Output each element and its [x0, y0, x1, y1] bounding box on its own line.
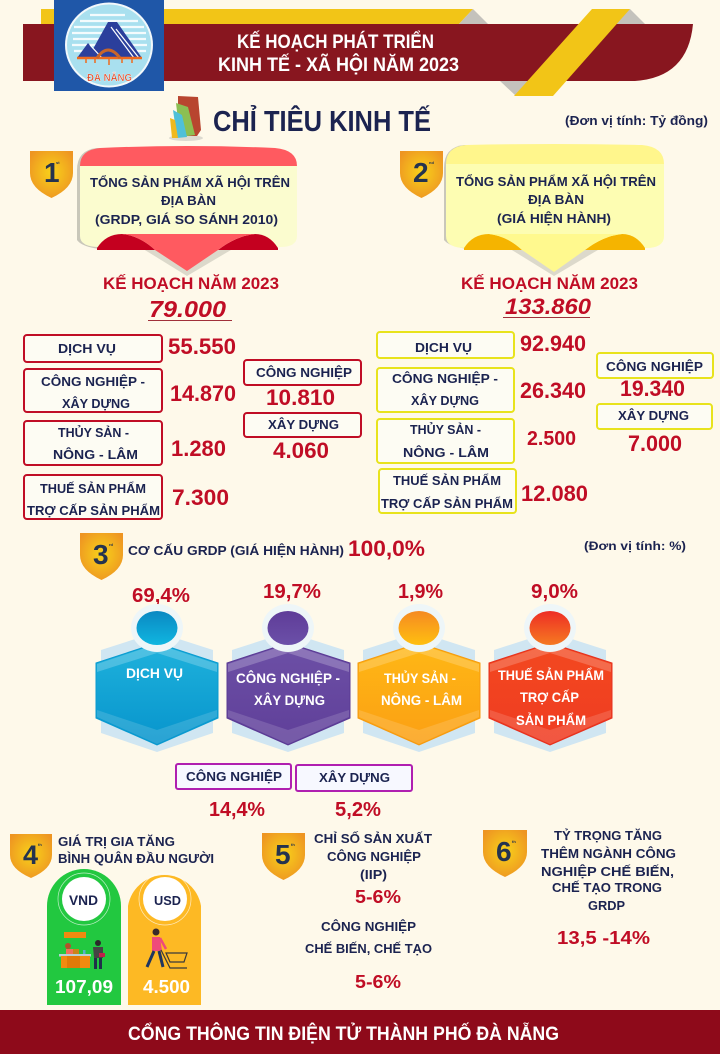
- right sub-item: industry: [597, 353, 713, 401]
- badge 4: th: [38, 842, 42, 847]
- hexagon: services: DỊCH VỤ: [126, 665, 183, 681]
- card: USD: USD: [154, 893, 181, 908]
- text block: manufacturing: CHẾ BIẾN, CHẾ TẠO: [305, 941, 432, 956]
- heading: GRDP structure: CƠ CẤU GRDP (GIÁ HIỆN HÀNH): [128, 543, 344, 558]
- plan 2023 total: 79.000: [103, 274, 279, 322]
- left sub-item: industry: 10.810: [266, 385, 335, 410]
- text block: industrial production index: CHỈ SỐ SẢN XUẤT: [314, 831, 432, 846]
- badge 2: nd: [429, 160, 434, 165]
- banner title: KINH TẾ - XÃ HỘI NĂM 2023: [218, 54, 459, 76]
- unit note: billion dong: (Đơn vị tính: Tỷ đồng): [565, 114, 708, 128]
- left sub-item: industry: [244, 360, 361, 410]
- hexagon: fisheries, agriculture, forestry: 1,9%: [398, 581, 443, 603]
- logo: Da Nang: [54, 0, 164, 91]
- text block: industrial production index: [314, 831, 432, 907]
- left sub-item: industry: CÔNG NGHIỆP: [256, 365, 352, 380]
- footer: [0, 1010, 720, 1054]
- left breakdown: fisheries, agriculture, forestry: NÔNG - LÂM: [53, 447, 138, 462]
- logo wordmark: ĐÀ NẴNG: [87, 71, 132, 84]
- callout 1 text: TỔNG SẢN PHẨM XÃ HỘI TRÊN: [90, 175, 290, 190]
- badge 6: th: [512, 839, 516, 844]
- hexagon: industry and construction: 19,7%: [263, 581, 321, 603]
- right breakdown: services: [377, 331, 586, 358]
- callout 2 text: TỔNG SẢN PHẨM XÃ HỘI TRÊN: [456, 174, 656, 189]
- hexagon: fisheries, agriculture, forestry: NÔNG - LÂM: [381, 691, 462, 708]
- heading: economic targets: CHỈ TIÊU KINH TẾ: [213, 104, 431, 138]
- banner title: KẾ HOẠCH PHÁT TRIỂN: [237, 31, 434, 53]
- badge 1: [30, 151, 73, 198]
- badge 1: st: [56, 160, 60, 165]
- right sub-item: construction: [597, 404, 712, 456]
- badge 2: [400, 151, 443, 198]
- right breakdown: fisheries, agriculture, forestry: THỦY SẢN -: [410, 422, 481, 437]
- unit note: percent: (Đơn vị tính: %): [584, 539, 686, 553]
- sub-item: construction share: [296, 765, 412, 821]
- left breakdown: services: DỊCH VỤ: [58, 341, 116, 356]
- badge 3: 3: [93, 539, 109, 570]
- left breakdown: industry and construction: [24, 369, 236, 412]
- heading: value added per capita: GIÁ TRỊ GIA TĂNG: [58, 834, 175, 849]
- hexagon: product taxes: THUẾ SẢN PHẨM: [498, 666, 604, 683]
- right breakdown: fisheries, agriculture, forestry: 2.500: [527, 428, 576, 450]
- left breakdown: industry and construction: 14.870: [170, 381, 236, 406]
- footer: CỔNG THÔNG TIN ĐIỆN TỬ THÀNH PHỐ ĐÀ NẴNG: [128, 1023, 559, 1045]
- left sub-item: construction: 4.060: [273, 438, 329, 463]
- sub-item: construction share: 5,2%: [335, 799, 381, 821]
- left breakdown: product taxes: TRỢ CẤP SẢN PHẨM: [27, 503, 160, 518]
- badge 6: [483, 830, 527, 877]
- right breakdown: product taxes: 12.080: [521, 481, 588, 506]
- left breakdown: fisheries, agriculture, forestry: [24, 421, 226, 465]
- left breakdown: product taxes: [24, 475, 229, 519]
- right sub-item: construction: XÂY DỰNG: [618, 408, 689, 423]
- callout 1 text: ĐỊA BÀN: [161, 193, 216, 208]
- hexagon: fisheries, agriculture, forestry: [358, 581, 480, 752]
- badge 5: th: [291, 842, 295, 847]
- sub-item: construction share: XÂY DỰNG: [319, 770, 390, 785]
- left breakdown: fisheries, agriculture, forestry: 1.280: [171, 436, 226, 461]
- left breakdown: industry and construction: CÔNG NGHIỆP -: [41, 374, 145, 389]
- left breakdown: fisheries, agriculture, forestry: THỦY SẢN -: [58, 425, 129, 440]
- text block: manufacturing share of GRDP: GRDP: [588, 898, 625, 913]
- hexagon: industry and construction: XÂY DỰNG: [254, 691, 325, 708]
- right breakdown: product taxes: TRỢ CẤP SẢN PHẨM: [381, 496, 513, 511]
- hexagon: product taxes: SẢN PHẨM: [516, 711, 586, 728]
- right sub-item: construction: 7.000: [628, 431, 682, 456]
- right breakdown: fisheries, agriculture, forestry: [377, 419, 576, 463]
- card: VND: VND: [69, 892, 98, 908]
- right breakdown: industry and construction: CÔNG NGHIỆP -: [392, 371, 498, 386]
- badge 4: 4: [23, 840, 38, 870]
- right breakdown: product taxes: THUẾ SẢN PHẨM: [393, 473, 501, 488]
- right breakdown: services: 92.940: [520, 331, 586, 356]
- callout 1 text: [90, 175, 290, 227]
- right breakdown: industry and construction: 26.340: [520, 378, 586, 403]
- hexagon: services: 69,4%: [132, 585, 190, 607]
- hexagon: services: [96, 585, 218, 752]
- left breakdown: product taxes: 7.300: [172, 485, 229, 510]
- badge 2: 2: [413, 157, 429, 188]
- card: USD: 4.500: [143, 977, 190, 997]
- right sub-item: industry: 19.340: [620, 376, 685, 401]
- callout 2 text: (GIÁ HIỆN HÀNH): [497, 211, 611, 226]
- icon: checkout counter: [59, 932, 105, 969]
- right breakdown: product taxes: [379, 469, 588, 513]
- callout 1 text: (GRDP, GIÁ SO SÁNH 2010): [95, 212, 278, 227]
- text block: manufacturing share of GRDP: 13,5 -14%: [557, 928, 650, 948]
- right breakdown: industry and construction: XÂY DỰNG: [411, 393, 479, 408]
- badge 5: [262, 833, 305, 880]
- hexagon: product taxes: [489, 581, 612, 752]
- callout 1: GRDP constant price: [77, 146, 297, 276]
- text block: manufacturing share of GRDP: THÊM NGÀNH CÔNG: [541, 846, 676, 861]
- callout 2 text: [456, 174, 656, 226]
- hexagon: product taxes: TRỢ CẤP: [520, 689, 579, 705]
- text block: industrial production index: 5-6%: [355, 887, 401, 907]
- heading: GRDP structure: 100,0%: [348, 536, 425, 561]
- left breakdown: product taxes: THUẾ SẢN PHẨM: [40, 481, 146, 496]
- card: USD: [128, 873, 201, 1005]
- text block: manufacturing share of GRDP: CHẾ TẠO TRONG: [552, 880, 662, 895]
- right sub-item: industry: CÔNG NGHIỆP: [606, 359, 703, 374]
- sub-item: industry share: [176, 764, 291, 821]
- card: VND: [47, 869, 121, 1005]
- text block: manufacturing share of GRDP: [541, 828, 676, 948]
- plan 2023 total: 79.000: KẾ HOẠCH NĂM 2023: [103, 274, 279, 293]
- badge 6: 6: [496, 836, 512, 867]
- banner title: [218, 31, 459, 76]
- left breakdown: industry and construction: XÂY DỰNG: [62, 396, 130, 411]
- text block: manufacturing: [305, 919, 432, 992]
- hexagon: industry and construction: CÔNG NGHIỆP -: [236, 669, 340, 686]
- badge 1: 1: [44, 157, 60, 188]
- callout 2 text: ĐỊA BÀN: [528, 192, 584, 207]
- heading: GRDP structure: [128, 536, 425, 561]
- badge 5: 5: [275, 839, 291, 870]
- text block: manufacturing: CÔNG NGHIỆP: [321, 919, 416, 934]
- heading: value added per capita: BÌNH QUÂN ĐẦU NGƯỜI: [58, 851, 214, 866]
- hexagon: product taxes: 9,0%: [531, 581, 578, 603]
- text block: industrial production index: (IIP): [360, 867, 387, 882]
- left breakdown: services: 55.550: [168, 334, 236, 359]
- card: VND: 107,09: [55, 977, 113, 997]
- hexagon: fisheries, agriculture, forestry: THỦY SẢN -: [384, 669, 456, 686]
- hexagon: industry and construction: [227, 581, 350, 752]
- text block: manufacturing: 5-6%: [355, 972, 401, 992]
- plan 2023 total: 133.860: KẾ HOẠCH NĂM 2023: [461, 274, 638, 293]
- badge 3: rd: [109, 542, 114, 547]
- plan 2023 total: 79.000: 79.000: [149, 296, 226, 322]
- heading: value added per capita: [58, 834, 214, 866]
- sub-item: industry share: 14,4%: [209, 799, 265, 821]
- icon: books: [169, 96, 203, 141]
- text block: industrial production index: CÔNG NGHIỆP: [327, 849, 421, 864]
- plan 2023 total: 133.860: [461, 274, 638, 319]
- left sub-item: construction: [244, 413, 361, 463]
- badge 4: [10, 834, 52, 878]
- right breakdown: industry and construction: [377, 368, 586, 412]
- header banner: [23, 9, 693, 96]
- icon: shopper with cart: [147, 928, 187, 968]
- plan 2023 total: 133.860: 133.860: [505, 294, 592, 319]
- right breakdown: fisheries, agriculture, forestry: NÔNG - LÂM: [403, 445, 489, 460]
- text block: manufacturing share of GRDP: TỶ TRỌNG TĂNG: [554, 828, 662, 843]
- callout 2: GRDP current price: [444, 144, 664, 276]
- badge 3: [80, 533, 123, 580]
- text block: manufacturing share of GRDP: NGHIỆP CHẾ BIẾN,: [541, 864, 674, 879]
- left breakdown: services: [24, 334, 236, 362]
- left sub-item: construction: XÂY DỰNG: [268, 417, 339, 432]
- sub-item: industry share: CÔNG NGHIỆP: [186, 769, 282, 784]
- right breakdown: services: DỊCH VỤ: [415, 340, 472, 355]
